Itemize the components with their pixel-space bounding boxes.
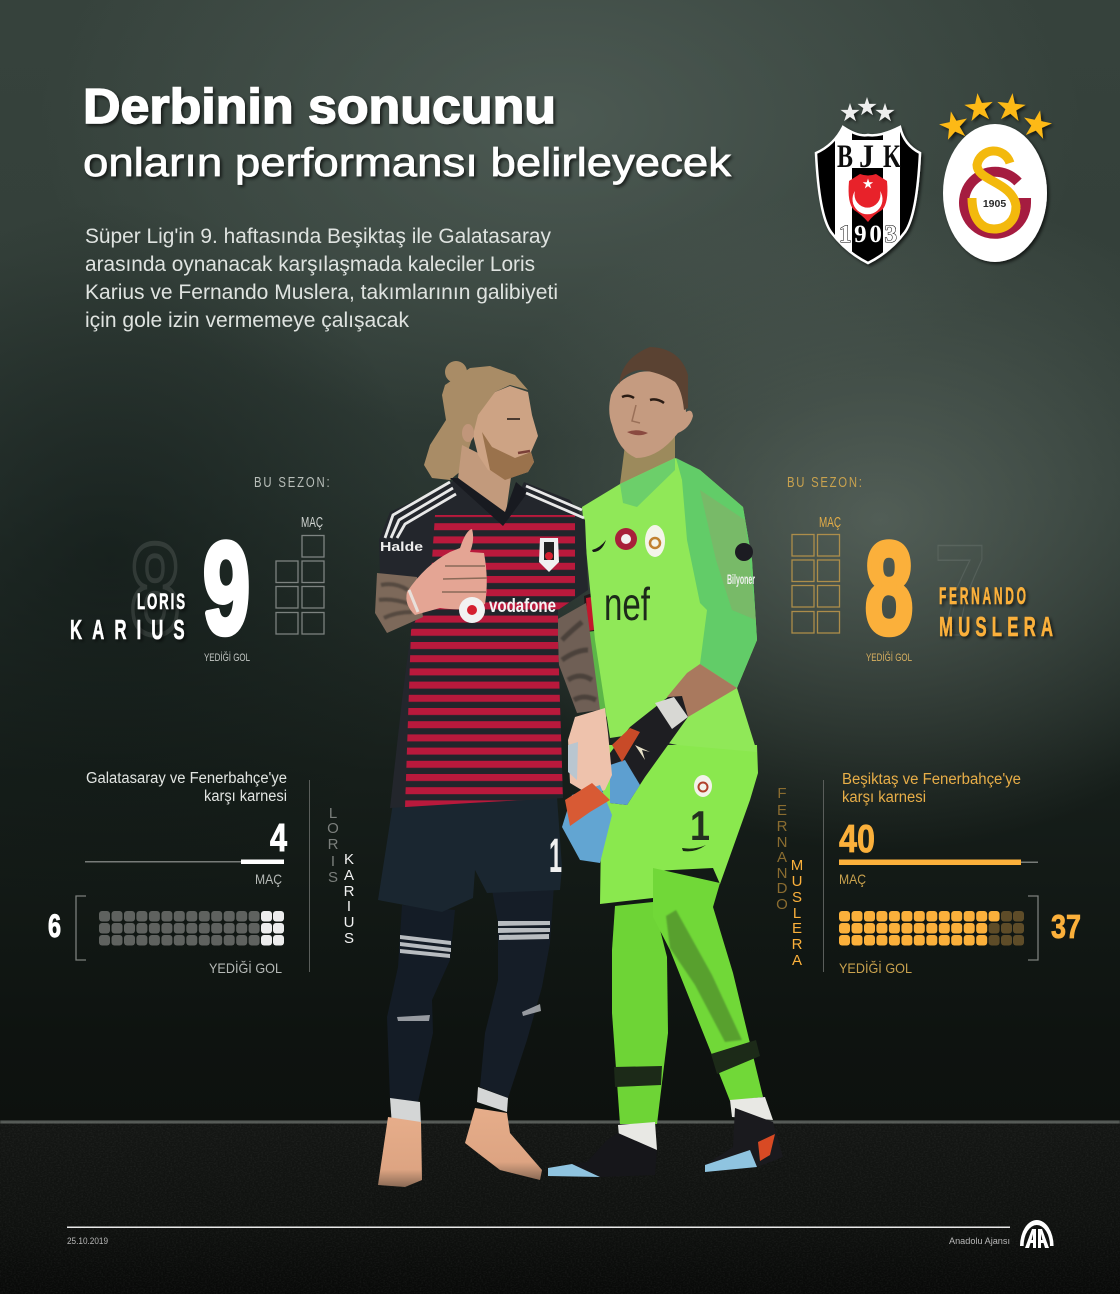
Karius lower glove — [562, 785, 612, 863]
logo: Beşiktaş crest: K — [883, 139, 901, 175]
Karius collar — [450, 478, 528, 526]
panel: Muslera derby record — [776, 771, 1081, 976]
Muslera jersey marks: Bilyoner — [727, 571, 755, 587]
Karius jersey sponsor — [459, 596, 556, 623]
Muslera right leg — [653, 868, 763, 1101]
number: 6 goals: 6 — [48, 908, 61, 944]
Muslera boots — [548, 1108, 783, 1177]
ghost number 8: 8 — [130, 516, 180, 662]
label: Maç: MAÇ — [301, 514, 323, 531]
intro text: Karius ve Fernando Muslera, takımlarının galibiyeti — [85, 280, 558, 304]
text: record heading: karşı karnesi — [204, 788, 287, 805]
Muslera shorts — [600, 745, 758, 904]
Karius sock stripes and logos — [397, 921, 550, 1021]
Karius left leg — [387, 905, 455, 1102]
Karius back arm — [556, 603, 600, 713]
logo: Beşiktaş crest: B — [837, 139, 853, 175]
Karius jersey sponsor: vodafone — [489, 596, 556, 617]
label: yediği gol: YEDİĞİ GOL — [866, 651, 912, 664]
number: 40 matches: 40 — [839, 818, 875, 861]
Muslera head — [609, 347, 693, 458]
logo: Beşiktaş crest: J — [859, 139, 874, 175]
panel: Muslera season stats — [787, 474, 1053, 664]
intro text: arasında oynanacak karşılaşmada kaleciler Loris — [85, 252, 535, 276]
Karius shoulder stripes — [385, 482, 584, 538]
grid: 8 matches — [792, 534, 840, 633]
bar: matches — [85, 860, 284, 864]
dot grid: goals conceded — [99, 911, 284, 946]
name: Fernando Muslera — [939, 584, 1053, 642]
Karius crest — [539, 538, 559, 572]
Muslera sleeve shading — [620, 458, 757, 688]
number: 4 matches: 4 — [270, 817, 287, 860]
text: record heading — [842, 771, 1021, 806]
Karius glove fingers — [409, 566, 487, 612]
player: Loris Karius — [375, 361, 612, 1187]
name: Loris Karius — [70, 590, 185, 645]
Karius jersey stripes — [405, 515, 575, 808]
Muslera shorts crest and number — [682, 775, 712, 851]
Muslera forearm and glove — [610, 664, 737, 805]
Karius shorts — [378, 797, 562, 912]
Karius jersey — [379, 478, 588, 808]
text: record heading: karşı karnesi — [842, 789, 926, 806]
title: Derbinin sonucunu — [83, 80, 556, 134]
Karius neck — [458, 445, 512, 520]
label: yediği gol: YEDİĞİ GOL — [209, 959, 282, 976]
vertical name: Karius: KARIUS — [344, 851, 355, 947]
Karius arm tattoos — [379, 584, 412, 618]
Karius right hand — [568, 708, 612, 795]
bracket — [1028, 896, 1038, 960]
logo: Beşiktaş crest — [816, 97, 920, 265]
Karius glove accent — [565, 783, 610, 826]
Muslera jersey marks: nef — [604, 578, 650, 630]
grass pitch with touch line — [0, 1120, 1120, 1294]
intro text: Süper Lig'in 9. haftasında Beşiktaş ile Galatasaray — [85, 224, 551, 248]
Muslera jersey — [582, 458, 757, 752]
logo: Beşiktaş crest: 1903 — [839, 221, 897, 248]
bracket — [76, 896, 86, 960]
Muslera far arm with armband — [584, 590, 611, 722]
name: Loris Karius: KARIUS — [70, 614, 185, 645]
Karius back arm tattoos — [562, 622, 596, 700]
title — [83, 80, 732, 185]
intro text — [85, 224, 558, 332]
vertical name: Fernando: FERNANDO — [776, 785, 788, 913]
Karius ankle socks — [390, 1087, 508, 1126]
label: yediği gol: YEDİĞİ GOL — [204, 651, 250, 664]
date: 25.10.2019 — [67, 1236, 108, 1246]
label: yediği gol: YEDİĞİ GOL — [839, 959, 912, 976]
player: Fernando Muslera — [548, 347, 783, 1177]
number: 37 goals: 37 — [1051, 908, 1081, 945]
Karius boots — [378, 1108, 542, 1187]
logo: Galatasaray crest — [937, 92, 1054, 262]
label: maç: MAÇ — [839, 871, 866, 887]
divider: left panel — [309, 780, 310, 972]
bar: matches — [839, 860, 1038, 865]
Karius right leg — [480, 885, 554, 1098]
text: record heading: Beşiktaş ve Fenerbahçe'ye — [842, 771, 1021, 788]
Muslera left leg — [612, 902, 668, 1124]
vertical name: Muslera: MUSLERA — [791, 857, 803, 969]
panel: Karius derby record — [48, 770, 355, 976]
credit: Anadolu Ajansı — [949, 1236, 1010, 1246]
heading: Bu sezon: BU SEZON: — [254, 474, 330, 490]
logo: Galatasaray crest: 1905 — [983, 198, 1006, 210]
intro text: için gole izin vermemeye çalışacak — [85, 308, 409, 332]
footer — [67, 1220, 1054, 1248]
dot grid: goals conceded — [839, 911, 1024, 946]
Karius pink glove — [406, 529, 487, 615]
text: record heading: Galatasaray ve Fenerbahçe'ye — [86, 770, 287, 787]
heading: Bu sezon: BU SEZON: — [787, 474, 862, 490]
grid: 7 matches — [276, 536, 324, 634]
Muslera shorts crest and number: 1 — [690, 802, 710, 849]
Muslera neck — [620, 430, 675, 484]
label: maç: MAÇ — [255, 871, 282, 887]
label: Maç: MAÇ — [819, 514, 841, 531]
Karius head — [473, 386, 538, 478]
number: goals conceded 8: 8 — [865, 515, 913, 661]
Muslera jersey marks — [592, 525, 755, 630]
divider: right panel — [823, 780, 824, 972]
name: Loris Karius: LORIS — [137, 590, 185, 614]
ghost number 7: 7 — [934, 517, 986, 663]
Karius hair — [424, 361, 528, 480]
Muslera leg mud and socks — [614, 910, 773, 1150]
Karius sleeve sponsor: Halde — [380, 539, 423, 554]
text: record heading — [86, 770, 287, 805]
name: Fernando Muslera: FERNANDO — [939, 584, 1026, 610]
title: onların performansı belirleyecek — [83, 141, 732, 185]
panel: Karius season stats — [70, 474, 330, 664]
Karius face details — [462, 419, 534, 480]
Karius wrist band — [568, 742, 578, 780]
player: Loris Karius: 1 — [549, 830, 562, 883]
number: goals conceded 9: 9 — [203, 515, 250, 661]
name: Fernando Muslera: MUSLERA — [939, 611, 1053, 642]
Karius front arm — [375, 573, 423, 633]
vertical name: Loris: LORIS — [327, 805, 339, 886]
icon: Anadolu Agency logo — [1020, 1220, 1054, 1248]
